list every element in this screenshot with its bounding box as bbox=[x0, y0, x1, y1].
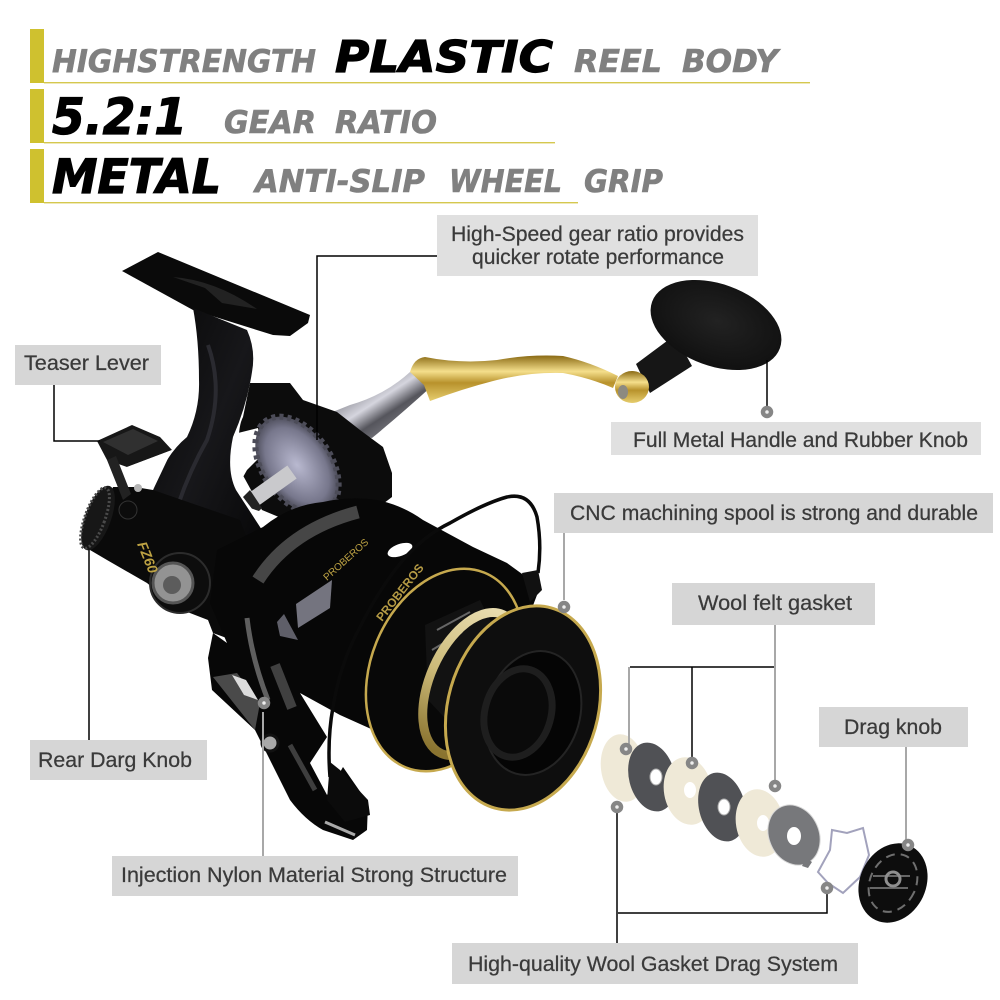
label: high-speed gear ratio: quicker rotate performance bbox=[472, 245, 724, 269]
star spring bbox=[818, 828, 869, 893]
rear body and drag knob bbox=[74, 482, 258, 640]
headline band: high strength plastic reel body: BODY bbox=[682, 44, 782, 80]
headline band: gear ratio bbox=[30, 88, 555, 146]
drag knob bbox=[846, 832, 940, 934]
headline band: high strength plastic reel body bbox=[30, 29, 810, 83]
label: rear drag knob bbox=[30, 740, 207, 780]
headline band: high strength plastic reel body: PLASTIC bbox=[335, 32, 553, 83]
foot and stem of the reel bbox=[122, 252, 310, 600]
rear body and drag knob: FZ60 bbox=[134, 539, 161, 576]
label: full metal handle bbox=[611, 422, 981, 455]
spool with rear flange, gold ring and front flange: PROBEROS bbox=[373, 561, 427, 624]
label: teaser lever: Teaser Lever bbox=[24, 351, 149, 375]
label: injection nylon bbox=[112, 856, 518, 896]
headline band: metal anti-slip wheel grip: METAL bbox=[52, 150, 221, 205]
grey keyed disc bbox=[759, 797, 829, 873]
felt disc 3 bbox=[730, 785, 790, 861]
headline band: high strength plastic reel body: HIGHSTRENGTH bbox=[52, 44, 316, 80]
headline band: gear ratio: GEAR bbox=[224, 105, 316, 141]
rotor cup and arms: PROBEROS bbox=[322, 537, 371, 583]
spool with rear flange, gold ring and front flange bbox=[337, 545, 624, 829]
bail wire and grip bbox=[327, 496, 542, 822]
label: full metal handle: Full Metal Handle and Rubber Knob bbox=[633, 428, 968, 452]
white opening between stem and gear bbox=[234, 428, 262, 486]
side housing behind the gear bbox=[239, 383, 392, 530]
teaser lever bbox=[97, 425, 172, 519]
felt disc 2 bbox=[658, 753, 718, 829]
label: teaser lever bbox=[15, 345, 161, 385]
headline band: metal anti-slip wheel grip: ANTI-SLIP bbox=[252, 164, 425, 200]
label: drag knob bbox=[819, 707, 968, 747]
headline band: metal anti-slip wheel grip bbox=[30, 149, 663, 205]
wool gasket discs, spring and drag knob exploded view bbox=[596, 731, 940, 934]
label: drag knob: Drag knob bbox=[844, 715, 942, 739]
label: wool felt gasket: Wool felt gasket bbox=[698, 591, 852, 615]
reel handle with gold arm and rubber knob bbox=[330, 263, 794, 438]
white gap under the gear bbox=[250, 508, 302, 542]
headline band: metal anti-slip wheel grip: WHEEL bbox=[449, 164, 562, 200]
label: high-speed gear ratio bbox=[437, 215, 758, 276]
dark metal disc 2 bbox=[691, 767, 753, 847]
label: high-speed gear ratio: High-Speed gear ratio provides bbox=[451, 222, 744, 246]
label: wool gasket drag system bbox=[452, 943, 858, 984]
headline band: gear ratio: RATIO bbox=[335, 105, 437, 141]
headline band: high strength plastic reel body: REEL bbox=[574, 44, 662, 80]
dark metal disc 1 bbox=[621, 737, 683, 817]
headline band: gear ratio: 5.2:1 bbox=[52, 88, 187, 146]
rotor cup and arms bbox=[208, 498, 540, 840]
label: wool felt gasket bbox=[672, 583, 875, 625]
leader lines and marker dots bbox=[54, 256, 912, 943]
label: cnc spool bbox=[554, 493, 993, 533]
label: injection nylon: Injection Nylon Material Strong Structure bbox=[121, 863, 507, 887]
fishing reel illustration bbox=[74, 252, 794, 840]
label: cnc spool: CNC machining spool is strong and durable bbox=[570, 501, 978, 525]
main gear and pinion bbox=[238, 401, 356, 529]
label: wool gasket drag system: High-quality Wool Gasket Drag System bbox=[468, 952, 838, 976]
headline band: metal anti-slip wheel grip: GRIP bbox=[584, 164, 663, 200]
felt disc 1 bbox=[596, 731, 650, 805]
label: rear drag knob: Rear Darg Knob bbox=[38, 748, 192, 772]
